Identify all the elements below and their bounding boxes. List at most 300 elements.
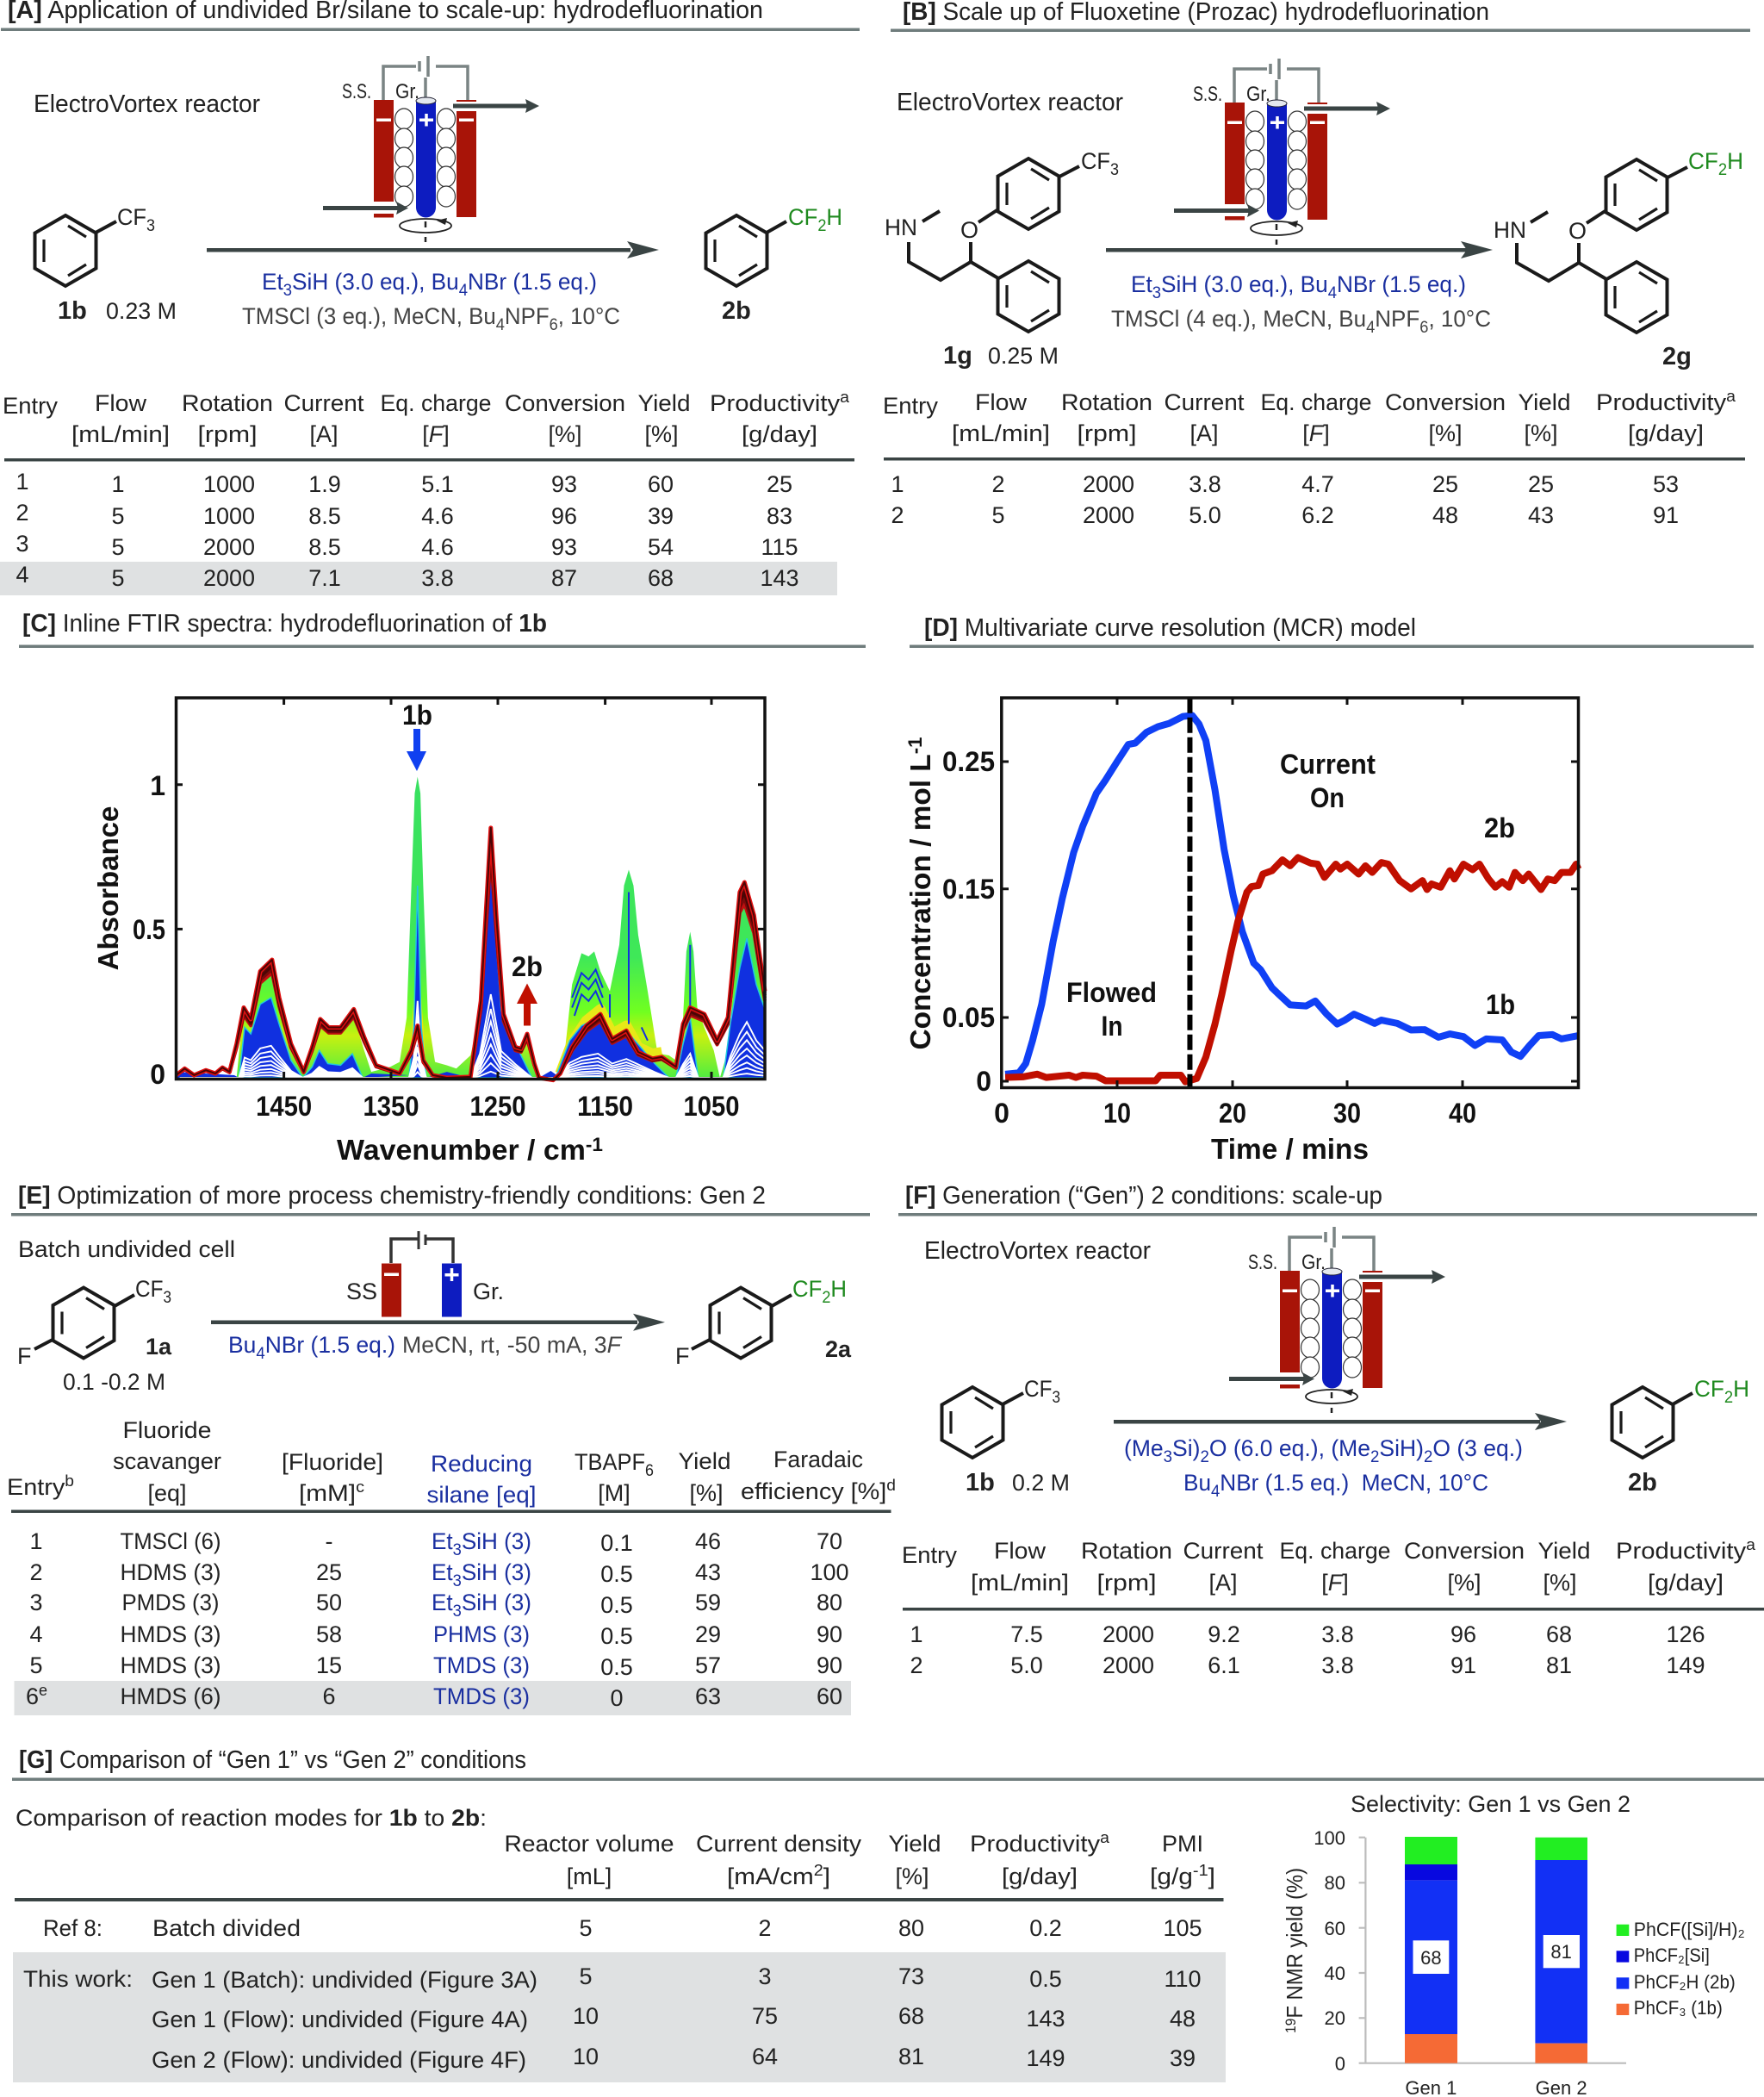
- comparison rows: 81: [898, 2044, 924, 2069]
- molecule 1b: CF3: [117, 204, 155, 235]
- table B header: Eq. charge: [1261, 389, 1371, 415]
- heading F: [F] Generation (“Gen”) 2 conditions: scale-up: [905, 1182, 1382, 1210]
- table E rows: PMDS (3): [122, 1590, 219, 1615]
- table A rows: 2000: [203, 534, 255, 560]
- table E rows: -: [326, 1528, 332, 1554]
- axis labels: 1: [150, 770, 165, 801]
- annotations: Flowed: [1066, 977, 1157, 1008]
- comparison rows: 73: [898, 1963, 924, 1989]
- table B rows: 53: [1653, 471, 1679, 497]
- table E rows: TMSCl (6): [121, 1528, 220, 1554]
- table E rows: PHMS (3): [433, 1621, 530, 1647]
- table E rows: 0.1: [600, 1530, 633, 1556]
- table A rows: 83: [767, 503, 792, 529]
- compound labels F: 1b: [966, 1469, 995, 1497]
- table E header: [Fluoride]: [282, 1449, 383, 1475]
- table A rows: 5.1: [421, 471, 454, 497]
- table A header: Current: [284, 390, 364, 416]
- table E rows: 60: [817, 1683, 842, 1709]
- table A rows: 3: [16, 531, 29, 557]
- comparison header: Yield: [889, 1831, 941, 1857]
- table F header: [%]: [1447, 1570, 1481, 1596]
- y axis labels: 80: [1325, 1872, 1345, 1894]
- reagents F: Bu4NBr (1.5 eq.) MeCN, 10°C: [1183, 1470, 1488, 1501]
- molecule 1a: F: [17, 1343, 31, 1369]
- molecule 1g: O: [960, 217, 978, 243]
- legend: PhCF([Si]/H)₂: [1634, 1919, 1745, 1940]
- table A rows: 7.1: [308, 565, 341, 591]
- molecule 1b (F): CF3: [1024, 1376, 1060, 1407]
- comparison rows: 110: [1164, 1966, 1202, 1992]
- table F header: [g/day]: [1648, 1570, 1724, 1596]
- table E rows: 63: [695, 1683, 721, 1709]
- table F header: [%]: [1543, 1570, 1577, 1596]
- reagents B: TMSCl (4 eq.), MeCN, Bu4NPF6, 10°C: [1111, 306, 1491, 337]
- table E header: scavanger: [113, 1448, 221, 1474]
- table B header: Rotation: [1061, 389, 1152, 415]
- table B header: Entry: [883, 393, 938, 419]
- icon: ElectroVortex reactor A: [323, 56, 539, 242]
- table E header: Entryb: [7, 1472, 74, 1500]
- table A rows: 4.6: [421, 534, 454, 560]
- table A rows: 8.5: [308, 534, 341, 560]
- table B rows: 91: [1653, 502, 1679, 528]
- heading E: [E] Optimization of more process chemistry-friendly conditions: Gen 2: [18, 1182, 766, 1210]
- table F rows: 96: [1450, 1621, 1476, 1647]
- y axis labels: 40: [1325, 1963, 1345, 1984]
- panel G: Gen 1 vs Gen 2 comparison: [12, 1746, 1764, 2097]
- table E rows: 25: [316, 1559, 342, 1585]
- icon: ElectroVortex reactor B: [1174, 59, 1390, 245]
- arrow: 1b decreasing: [402, 700, 432, 771]
- table B rows: 4.7: [1301, 471, 1334, 497]
- molecule 1a: [17, 1276, 172, 1395]
- table E rows: HDMS (3): [121, 1559, 220, 1585]
- comparison header: PMI: [1162, 1831, 1203, 1857]
- table A rows: 1: [111, 471, 125, 497]
- table B header: Flow: [975, 389, 1028, 415]
- comparison rows: [23, 1915, 1202, 2073]
- axis labels: 0.25: [942, 746, 995, 777]
- table F rows: 68: [1546, 1621, 1572, 1647]
- table A header: [g/day]: [742, 421, 817, 447]
- table A rows: 115: [761, 534, 798, 560]
- table A rows: 5: [111, 503, 125, 529]
- axis labels: [92, 770, 739, 1166]
- arrow: reaction F: [1114, 1413, 1567, 1430]
- table F header: Conversion: [1404, 1538, 1525, 1564]
- y axis title: 19F NMR yield (%): [1282, 1868, 1307, 2033]
- table A rows: 93: [551, 534, 577, 560]
- table E header: Faradaic: [773, 1447, 863, 1472]
- reagents F: [1124, 1435, 1523, 1501]
- table A rows: 4: [16, 562, 29, 588]
- comparison rows: 5: [579, 1963, 593, 1989]
- chart title: selectivity: Selectivity: Gen 1 vs Gen 2: [1351, 1791, 1630, 1817]
- table E rows: TMDS (3): [433, 1652, 530, 1678]
- table F header: Productivity a: [1616, 1536, 1756, 1564]
- molecule 1g: HN: [885, 215, 917, 240]
- table F header: [F]: [1321, 1570, 1349, 1596]
- panel B: Fluoxetine scale-up: [883, 0, 1750, 528]
- table B header: Conversion: [1385, 389, 1506, 415]
- comparison rows: 5: [579, 1915, 593, 1941]
- table E rows: 0: [610, 1685, 624, 1711]
- arrow: 2b increasing: 2b: [512, 951, 543, 982]
- table E rows: HMDS (3): [121, 1621, 220, 1647]
- table A header: Rotation: [182, 390, 273, 416]
- molecule 2a: CF2H: [792, 1276, 847, 1307]
- axis labels: [904, 737, 1476, 1165]
- legend: PhCF₃ (1b): [1634, 1997, 1723, 2019]
- table B header: [g/day]: [1628, 420, 1704, 446]
- table F rows: 91: [1450, 1652, 1476, 1678]
- molecule 1b: [34, 204, 155, 286]
- table F rows: [910, 1621, 1705, 1678]
- comparison header: Reactor volume: [505, 1831, 674, 1857]
- table A rows: 1000: [203, 471, 255, 497]
- arrow: 2b increasing: [512, 951, 543, 1025]
- axis labels: 1250: [470, 1091, 525, 1122]
- table F rows: 9.2: [1208, 1621, 1240, 1647]
- molecule 2a: F: [675, 1343, 689, 1369]
- table F header: [A]: [1208, 1570, 1238, 1596]
- curve: 2b: [1005, 857, 1579, 1082]
- axis labels: 0: [150, 1059, 165, 1090]
- table E rows: 90: [817, 1652, 842, 1678]
- comparison header: [%]: [895, 1864, 929, 1889]
- axis labels: 0: [976, 1066, 991, 1097]
- comparison rows: 2: [758, 1915, 772, 1941]
- table B rows: 25: [1528, 471, 1554, 497]
- table F rows: 3.8: [1321, 1621, 1354, 1647]
- table F header: [902, 1536, 1756, 1596]
- compound labels F: 2b: [1628, 1469, 1657, 1497]
- bar: Gen 1: [1405, 1837, 1457, 2063]
- table B header: [%]: [1428, 420, 1463, 446]
- table E header: Reducing: [431, 1451, 532, 1477]
- compound labels A: [58, 297, 751, 325]
- table E rows: 50: [316, 1590, 342, 1615]
- table B header: [A]: [1189, 420, 1219, 446]
- table B rows: 6.2: [1301, 502, 1334, 528]
- molecule 1b (F): [942, 1376, 1060, 1458]
- table E rows: 4: [29, 1621, 43, 1647]
- comparison rows: 149: [1026, 2045, 1065, 2071]
- icon: batch cell electrodes: [346, 1231, 504, 1316]
- table B rows: 43: [1528, 502, 1554, 528]
- table E rows: Et3SiH (3): [432, 1590, 531, 1621]
- y axis labels: 20: [1325, 2007, 1345, 2029]
- table F header: Yield: [1538, 1538, 1590, 1564]
- table E rows: 100: [810, 1559, 849, 1585]
- axis labels: 0.05: [942, 1002, 995, 1033]
- icon: ElectroVortex reactor B: Gr.: [1246, 83, 1270, 106]
- table A header: Productivity a: [710, 389, 850, 416]
- reactor label B: ElectroVortex reactor: [897, 89, 1123, 116]
- table F rows: 7.5: [1010, 1621, 1043, 1647]
- arrow: reaction A: [207, 241, 659, 258]
- table A header: Yield: [637, 390, 691, 416]
- table B rows: 2: [891, 502, 904, 528]
- table B header: Current: [1165, 389, 1245, 415]
- table F rows: 2000: [1102, 1652, 1154, 1678]
- table A rows: 5: [111, 565, 125, 591]
- heading C: [C] Inline FTIR spectra: hydrodefluorination of 1b: [22, 610, 547, 638]
- panel C: FTIR spectra: [19, 610, 866, 1166]
- comparison rows: 64: [752, 2044, 778, 2069]
- comparison table: [13, 1829, 1226, 2082]
- comparison rows: 0.5: [1029, 1966, 1062, 1992]
- reagents B: [1111, 271, 1491, 337]
- panel E: Gen 2 optimization: [7, 1182, 896, 1715]
- panel D: MCR model: [904, 614, 1754, 1165]
- comparison rows: 48: [1170, 2006, 1196, 2032]
- arrow: reaction E: [211, 1314, 665, 1331]
- table A header: [F]: [422, 421, 450, 447]
- table B header: Yield: [1518, 389, 1571, 415]
- molecule 1a: 1a: [146, 1334, 172, 1360]
- compound labels B: 0.25 M: [988, 343, 1059, 369]
- axis labels: 30: [1333, 1098, 1361, 1129]
- table A rows: 2000: [203, 565, 255, 591]
- compound labels A: 2b: [722, 297, 751, 325]
- table E header: [mM] c: [299, 1478, 364, 1506]
- table A header: [%]: [548, 421, 582, 447]
- axis labels: 10: [1103, 1098, 1131, 1129]
- molecule 2b: CF2H: [788, 204, 842, 235]
- molecule 2a: 2a: [825, 1336, 852, 1362]
- chart: FTIR spectra: [92, 698, 765, 1166]
- heading D: [D] Multivariate curve resolution (MCR) model: [924, 614, 1416, 642]
- compound labels B: 2g: [1662, 343, 1692, 370]
- molecule 1a: CF3: [135, 1276, 171, 1307]
- compound labels F: 0.2 M: [1012, 1470, 1070, 1496]
- axis labels: 1450: [256, 1091, 312, 1122]
- table E rows: 80: [817, 1590, 842, 1615]
- table A rows: 5: [111, 534, 125, 560]
- table E header: [eq]: [147, 1480, 187, 1506]
- comparison rows: This work:: [23, 1966, 133, 1992]
- reagents E: MeCN, rt, -50 mA, 3F: [402, 1332, 622, 1358]
- table B header: [883, 388, 1736, 446]
- molecule 2b (F): [1612, 1376, 1749, 1458]
- chart: selectivity stacked bars: [1282, 1827, 1745, 2097]
- table F rows: 2000: [1102, 1621, 1154, 1647]
- compound labels B: 1g: [943, 342, 972, 370]
- axis labels: 1350: [363, 1091, 419, 1122]
- bar: Gen 1: 68: [1420, 1947, 1442, 1969]
- molecule 1g: CF3: [1081, 148, 1119, 179]
- table B rows: 2000: [1083, 471, 1134, 497]
- table E rows: 58: [316, 1621, 342, 1647]
- reagents E: [228, 1332, 622, 1363]
- y axis labels: 100: [1314, 1827, 1345, 1849]
- table A rows: 1000: [203, 503, 255, 529]
- table F header: Eq. charge: [1280, 1538, 1390, 1564]
- axis labels: Concentration / mol L-1: [904, 737, 936, 1049]
- table F header: Rotation: [1081, 1538, 1172, 1564]
- chart: concentration vs time: [904, 698, 1579, 1165]
- table F rows: 81: [1546, 1652, 1572, 1678]
- molecule 1g: [885, 148, 1119, 332]
- comparison rows: Gen 2 (Flow): undivided (Figure 4F): [152, 2047, 526, 2073]
- bar: Gen 2: [1535, 1838, 1587, 2063]
- table B header: [mL/min]: [952, 420, 1050, 446]
- comparison rows: Gen 1 (Flow): undivided (Figure 4A): [152, 2007, 528, 2032]
- table A header: Conversion: [505, 390, 625, 416]
- axis labels: 1050: [684, 1091, 739, 1122]
- axis labels: Absorbance: [92, 806, 124, 970]
- table A rows: 143: [760, 565, 799, 591]
- icon: ElectroVortex reactor A: S.S.: [342, 80, 371, 103]
- arrow: reaction B: [1106, 241, 1493, 258]
- molecule 2g: O: [1568, 218, 1587, 244]
- comparison rows: Gen 1 (Batch): undivided (Figure 3A): [152, 1967, 537, 1993]
- table E rows: 57: [695, 1652, 721, 1678]
- reagents A: [242, 269, 620, 334]
- table F header: Flow: [994, 1538, 1047, 1564]
- table F rows: 126: [1666, 1621, 1705, 1647]
- curve: 1b: [1005, 715, 1579, 1074]
- table A rows: 93: [551, 471, 577, 497]
- table F rows: 3.8: [1321, 1652, 1354, 1678]
- table A rows: 87: [551, 565, 577, 591]
- reactor label A: ElectroVortex reactor: [34, 90, 260, 118]
- table A rows: 8.5: [308, 503, 341, 529]
- table subtitle: Comparison of reaction modes for 1b to 2b:: [16, 1805, 487, 1831]
- table E rows: HMDS (3): [121, 1652, 220, 1678]
- reagents A: Et3SiH (3.0 eq.), Bu4NBr (1.5 eq.): [262, 269, 597, 300]
- table A rows: 1.9: [308, 471, 341, 497]
- table A rows: 96: [551, 503, 577, 529]
- table A header: Flow: [95, 390, 147, 416]
- table A header: [mL/min]: [71, 421, 170, 447]
- axis labels: 40: [1449, 1098, 1476, 1129]
- table E: [7, 1417, 896, 1715]
- table A header: Eq. charge: [381, 390, 491, 416]
- heading G: [G] Comparison of “Gen 1” vs “Gen 2” conditions: [19, 1746, 526, 1774]
- table A header: [rpm]: [198, 421, 257, 447]
- table B rows: 5.0: [1189, 502, 1221, 528]
- table E rows: 15: [316, 1652, 342, 1678]
- panel A: undivided scale-up: [0, 0, 860, 595]
- table E rows: 0.5: [600, 1561, 633, 1587]
- icon: ElectroVortex reactor F: S.S.: [1248, 1251, 1277, 1274]
- comparison header: [g/g -1]: [1150, 1862, 1215, 1889]
- table F header: [rpm]: [1097, 1570, 1156, 1596]
- table E rows: 46: [695, 1528, 721, 1554]
- table B header: [%]: [1524, 420, 1558, 446]
- table A rows: 60: [648, 471, 674, 497]
- table B rows: 3.8: [1189, 471, 1221, 497]
- y axis labels: [1314, 1827, 1345, 2075]
- compound labels A: 0.23 M: [106, 298, 177, 324]
- table E rows: 0.5: [600, 1592, 633, 1618]
- start spectra envelope: [177, 777, 765, 1078]
- table E rows: 59: [695, 1590, 721, 1615]
- table E header: Fluoride: [122, 1417, 212, 1443]
- table F rows: 1: [910, 1621, 923, 1647]
- table B header: [F]: [1302, 420, 1330, 446]
- table E rows: [26, 1528, 849, 1711]
- table E rows: 3: [29, 1590, 43, 1615]
- reagents A: TMSCl (3 eq.), MeCN, Bu4NPF6, 10°C: [242, 303, 620, 334]
- table B rows: 1: [891, 471, 904, 497]
- annotations: On: [1310, 782, 1345, 813]
- comparison header: [505, 1829, 1215, 1889]
- table E header: TBAPF6: [575, 1449, 654, 1480]
- table E rows: 0.5: [600, 1623, 633, 1649]
- annotations: Current: [1280, 749, 1376, 780]
- comparison header: Current density: [696, 1831, 862, 1857]
- table B header: [rpm]: [1077, 420, 1137, 446]
- compound labels A: 1b: [58, 297, 87, 325]
- table B rows: 2: [991, 471, 1005, 497]
- table A rows: 68: [648, 565, 674, 591]
- molecule 1a: 0.1 -0.2 M: [63, 1369, 165, 1395]
- comparison header: [mA/cm 2]: [727, 1862, 830, 1889]
- compound labels B: [943, 342, 1692, 370]
- table E header: [%]: [689, 1480, 724, 1506]
- axis labels: Time / mins: [1211, 1133, 1369, 1165]
- icon: batch cell electrodes: Gr.: [473, 1279, 504, 1304]
- comparison rows: 105: [1163, 1915, 1202, 1941]
- comparison rows: 80: [898, 1915, 924, 1941]
- table E header: [M]: [598, 1480, 630, 1506]
- table E rows: Et3SiH (3): [432, 1559, 531, 1590]
- comparison rows: 3: [758, 1963, 772, 1989]
- table A header: Entry: [3, 393, 58, 419]
- compound labels F: [966, 1469, 1657, 1497]
- annotations: In: [1101, 1011, 1123, 1042]
- annotations: 1b: [1486, 989, 1515, 1020]
- axis labels: 0.15: [942, 874, 995, 905]
- annotations: 2b: [1484, 812, 1515, 843]
- table E rows: 43: [695, 1559, 721, 1585]
- table A rows: 25: [767, 471, 792, 497]
- table A rows: 3.8: [421, 565, 454, 591]
- cell label E: Batch undivided cell: [18, 1236, 235, 1262]
- axis labels: 0: [994, 1098, 1009, 1129]
- final spectrum band: [177, 828, 765, 1080]
- reagents B: Et3SiH (3.0 eq.), Bu4NBr (1.5 eq.): [1131, 271, 1466, 302]
- comparison header: [mL]: [567, 1864, 612, 1889]
- comparison rows: 10: [573, 2044, 599, 2069]
- legend: [1617, 1919, 1745, 2019]
- table E rows: 5: [29, 1652, 43, 1678]
- axis labels: 0.5: [133, 914, 165, 945]
- table F: [902, 1536, 1764, 1678]
- arrow: 1b decreasing: 1b: [402, 700, 432, 731]
- table B rows: 48: [1432, 502, 1458, 528]
- table A header: [3, 389, 850, 447]
- comparison header: [g/day]: [1002, 1864, 1078, 1889]
- reactor label F: ElectroVortex reactor: [924, 1237, 1151, 1265]
- table A: [0, 389, 854, 595]
- table A rows: 39: [648, 503, 674, 529]
- dashed marker: [1187, 698, 1192, 1087]
- legend: PhCF₂H (2b): [1634, 1971, 1736, 1993]
- table F rows: 5.0: [1010, 1652, 1043, 1678]
- table F rows: 6.1: [1208, 1652, 1240, 1678]
- molecule 2b (F): CF2H: [1694, 1376, 1749, 1407]
- x axis labels: [1405, 2077, 1587, 2097]
- table B: [883, 388, 1745, 528]
- molecule 2g: [1494, 148, 1743, 333]
- table A header: [%]: [644, 421, 679, 447]
- table A rows: 54: [648, 534, 674, 560]
